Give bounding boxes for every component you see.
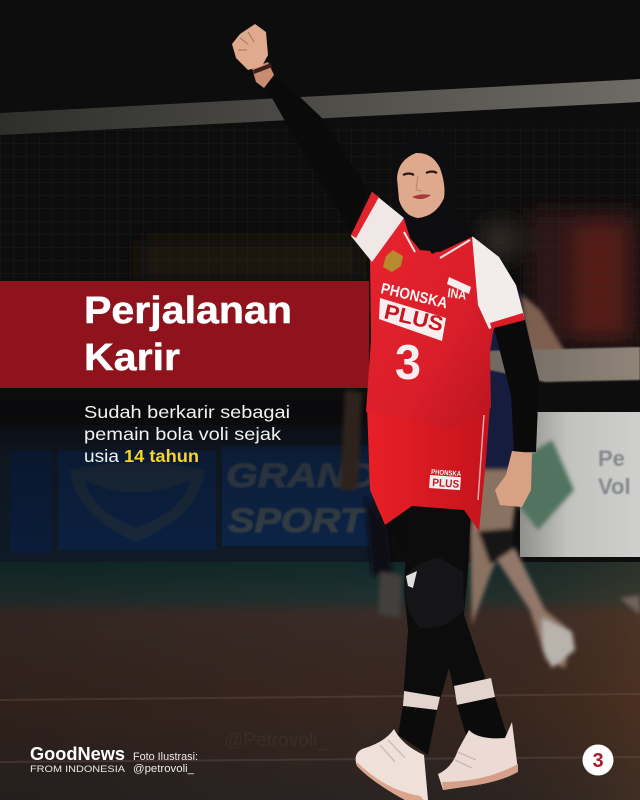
photo credit [133,751,198,775]
shorts logo: PHONSKA [431,469,461,478]
page number badge [582,744,614,776]
jersey torso [366,216,498,428]
logo tagline: FROM INDONESIA [30,764,126,775]
title line two: Karir [84,337,180,379]
left sock [403,691,440,710]
net top band [0,79,640,135]
right advertising board: Vol [598,474,631,499]
jersey text PHONSKA: PHONSKA [379,280,449,312]
right sock [454,678,495,705]
red title banner [0,281,369,388]
hijab [393,136,476,252]
left advertising board: GRAND [226,457,376,495]
background teammate [340,290,640,668]
left advertising board: SPORT [228,502,368,540]
floor lighting [0,562,640,800]
face [397,153,444,218]
jersey number 3: 3 [395,336,421,390]
right advertising board [518,412,640,557]
credit line one: Foto Ilustrasi: [133,751,198,763]
title [84,290,292,379]
jersey emblem [383,250,403,272]
knee pad [404,558,464,628]
court floor [0,562,640,800]
raised fist [232,24,274,88]
description text [84,402,290,466]
title line one: Perjalanan [84,290,292,332]
volleyball net mesh [0,125,640,350]
page number badge: 3 [592,750,604,772]
player [232,24,539,800]
shorts logo [429,469,461,491]
highlighted age: 14 tahun [124,446,199,466]
right arm sleeve [494,320,539,452]
indonesian flag [447,269,473,294]
shorts [367,405,490,531]
left shoe [356,729,428,800]
left advertising board [0,400,380,568]
jersey PLUS box: PLUS [382,300,446,336]
player legs in black leggings [403,505,492,700]
shorts logo: PLUS [432,477,460,491]
left jersey sleeve [351,192,404,262]
right jersey sleeve [472,236,525,330]
jersey text INA: INA [447,285,468,303]
blurred crowd behind the net [140,210,640,345]
raised arm sleeve [264,77,368,232]
logo: GoodNews from Indonesia [30,743,126,775]
right shoe [438,722,518,790]
description line one: Sudah berkarir sebagai [84,402,290,422]
description line three: usia [84,446,119,466]
player back leg [388,515,420,570]
net lower tape [480,347,640,382]
logo wordmark: GoodNews [30,743,125,764]
right hand [495,451,532,507]
right advertising board: Pe [598,446,625,471]
description line two: pemain bola voli sejak [84,424,281,444]
credit line two: @petrovoli_ [133,763,195,775]
faint photo watermark: @Petrovoli_ [224,730,328,751]
floor lines [0,694,640,762]
